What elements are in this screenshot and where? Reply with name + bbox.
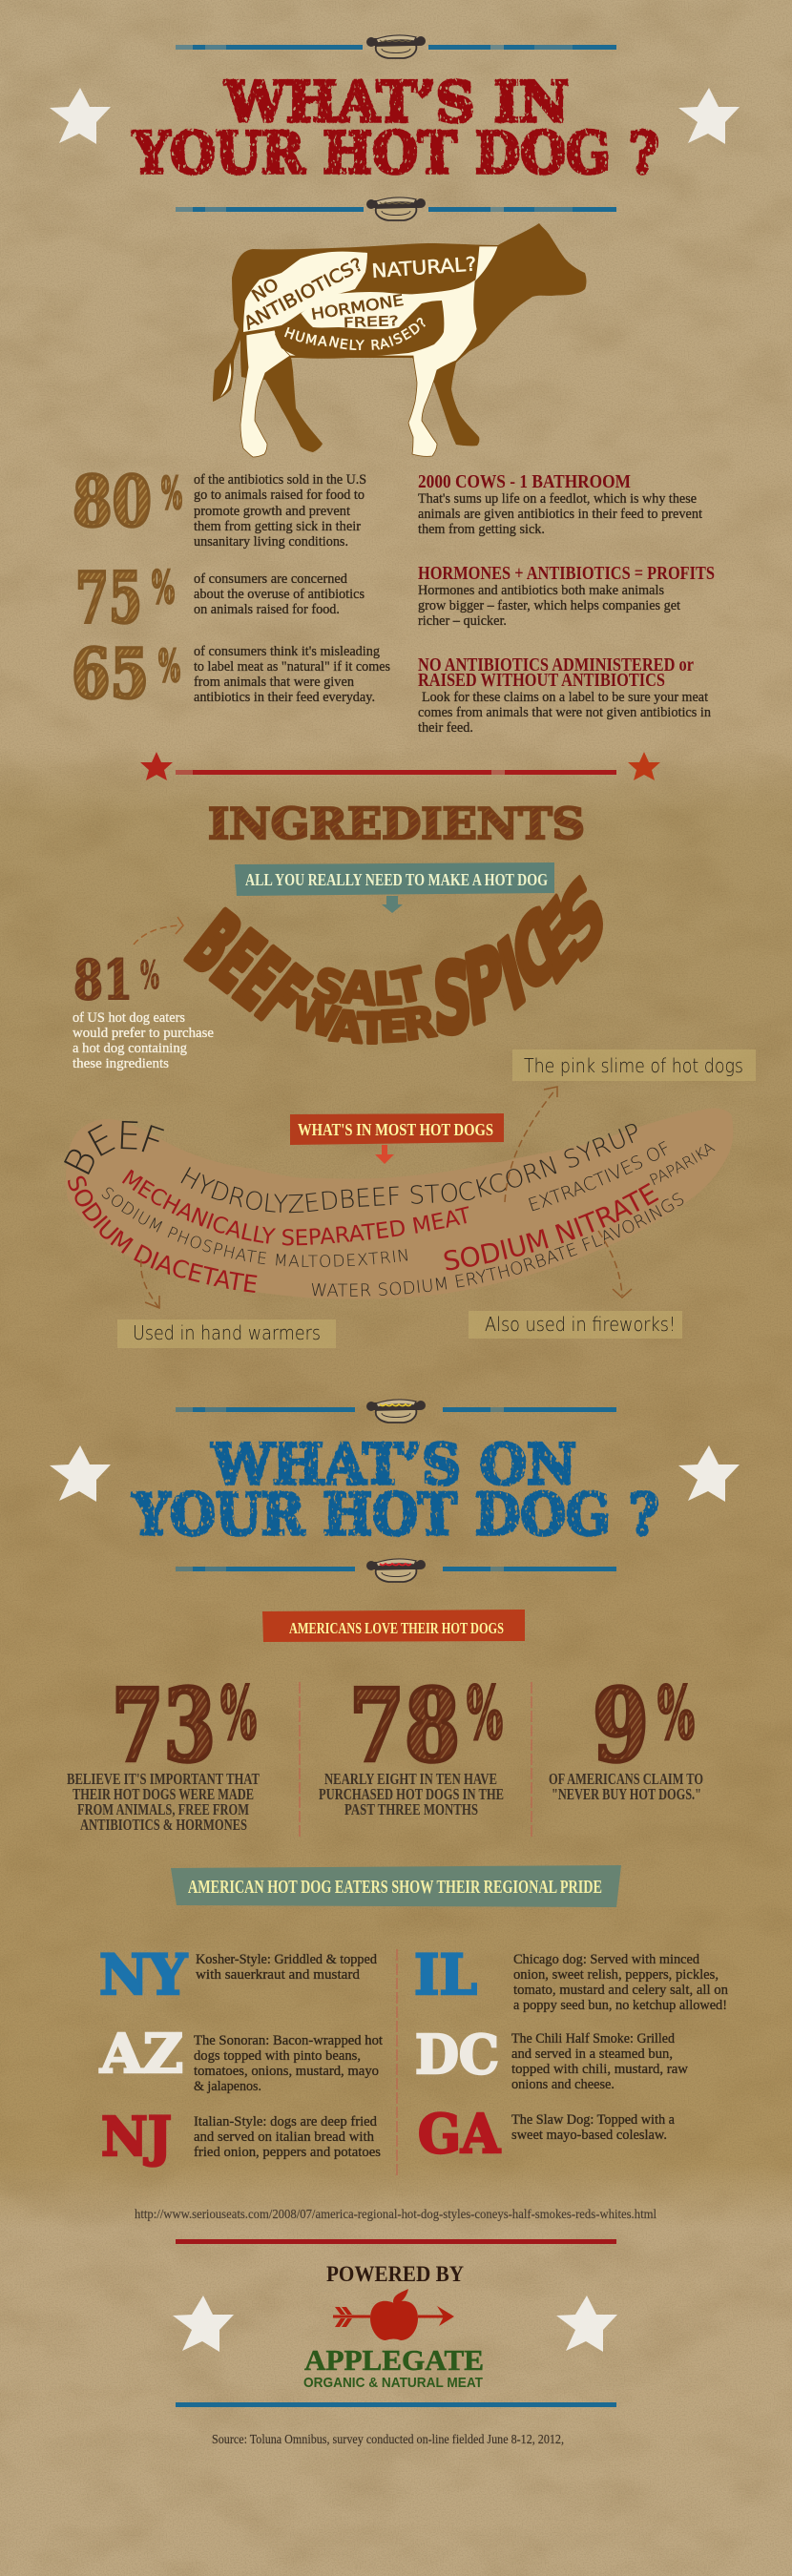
- region: IL: [414, 1942, 728, 2013]
- cow illustration: [213, 223, 586, 458]
- stat: 80 percent: %: [161, 467, 182, 519]
- stat: 81 percent: 81: [73, 948, 133, 1012]
- fact: hormones and antibiotics: richer – quicker.: [418, 613, 507, 629]
- stat: 78 percent: 78: [349, 1667, 460, 1784]
- stat: 9 percent: "NEVER BUY HOT DOGS.": [552, 1785, 701, 1803]
- bubble words: beef salt water spices: SPICES: [432, 855, 616, 1057]
- banner: what's in most hot dogs: WHAT'S IN MOST HOT DOGS: [298, 1120, 493, 1139]
- stat: 9 percent: OF AMERICANS CLAIM TO: [549, 1770, 703, 1788]
- ingredient: sodium nitrate: SODIUM NITRATE: [445, 1183, 658, 1271]
- fact: 2000 cows: [418, 471, 703, 537]
- fact: 2000 cows: them from getting sick.: [418, 522, 545, 537]
- region: DC: onions and cheese.: [511, 2077, 615, 2092]
- region: IL: IL: [414, 1942, 477, 2007]
- stat: 65 percent: of consumers think it's misleading: [194, 644, 380, 659]
- cow label: hormone free: [310, 291, 405, 331]
- region: AZ: AZ: [99, 2023, 183, 2086]
- dashed arrow to fireworks: [598, 1231, 632, 1298]
- dashed arrow to hand warmers: [141, 1259, 159, 1308]
- stat: 9 percent: 9: [593, 1667, 649, 1784]
- blue rule with ketchup hot dog: [176, 1559, 616, 1582]
- star left: [173, 2296, 234, 2352]
- cow label: natural: NATURAL?: [371, 252, 477, 282]
- title: what's in your hot dog: WHAT’S IN: [224, 70, 569, 135]
- callout: pink slime: The pink slime of hot dogs: [524, 1054, 743, 1077]
- title: what's on your hot dog: YOUR HOT DOG ?: [132, 1482, 659, 1548]
- region: NJ: and served on italian bread with: [194, 2129, 374, 2145]
- stat: 75 percent: 75: [75, 557, 142, 639]
- region: NJ: NJ: [101, 2106, 172, 2169]
- stat: 9 percent: %: [657, 1671, 695, 1755]
- top rule with hot dog icon: [176, 35, 616, 58]
- fact: hormones and antibiotics: grow bigger – faster, which helps companies get: [418, 598, 681, 613]
- stat: 80 percent: 80: [73, 461, 152, 543]
- region: NY: Kosher-Style: Griddled & topped: [196, 1952, 377, 1967]
- stat: 65 percent: %: [158, 640, 180, 692]
- stat: 73 percent: %: [220, 1671, 257, 1755]
- region: DC: The Chili Half Smoke: Grilled: [511, 2031, 675, 2046]
- stat: 73 percent: BELIEVE IT'S IMPORTANT THAT: [67, 1770, 260, 1788]
- banner: what's in most hot dogs: [290, 1113, 504, 1164]
- ingredient row: hydrolyzed beef stock, corn syrup: HYDROLYZEDBEEF STOCKCORN SYRUP: [181, 1124, 637, 1214]
- stat: 75 percent: about the overuse of antibiotics: [194, 587, 365, 602]
- stat: 65 percent: from animals that were given: [194, 675, 354, 690]
- region: GA: GA: [418, 2103, 501, 2166]
- stat: 9 percent: [549, 1667, 703, 1803]
- title: what's in your hot dog: YOUR HOT DOG ?: [132, 120, 659, 187]
- source url: http://www.seriouseats.com/2008/07/america-regional-hot-dog-styles-coneys-half-smokes-reds-whites.html: [135, 2208, 657, 2222]
- region: DC: DC: [415, 2024, 499, 2087]
- applegate logo: ORGANIC & NATURAL MEAT: [303, 2375, 483, 2391]
- blue rule with mustard hot dog: [176, 1400, 616, 1423]
- banner: regional pride: AMERICAN HOT DOG EATERS SHOW THEIR REGIONAL PRIDE: [188, 1877, 602, 1898]
- region: NJ: fried onion, peppers and potatoes: [194, 2145, 381, 2160]
- star left: [50, 1445, 111, 1502]
- region: NY: NY: [99, 1942, 188, 2007]
- stat: 81 percent: %: [140, 953, 159, 998]
- stat: 75 percent: of consumers are concerned: [194, 571, 347, 587]
- stat: 81 percent: of US hot dog eaters: [73, 1010, 185, 1026]
- fact: no antibiotics label: their feed.: [418, 720, 473, 736]
- region: GA: sweet mayo-based coleslaw.: [511, 2128, 667, 2143]
- region: IL: onion, sweet relish, peppers, pickles,: [513, 1967, 719, 1983]
- region: NY: [99, 1942, 377, 2007]
- stat: 81 percent: would prefer to purchase: [73, 1026, 214, 1041]
- icon: apple and arrow: [333, 2289, 454, 2340]
- region: AZ: tomatoes, onions, mustard, mayo: [194, 2064, 379, 2079]
- fact: no antibiotics label: comes from animals that were not given antibiotics in: [418, 705, 711, 720]
- fact: 2000 cows: That's sums up life on a feedlot, which is why these: [418, 491, 697, 507]
- stat: 75 percent: on animals raised for food.: [194, 602, 340, 617]
- banner: americans love their hot dogs: AMERICANS LOVE THEIR HOT DOGS: [289, 1619, 504, 1637]
- banner: regional pride: [171, 1865, 621, 1907]
- bubble words: beef salt water spices: WATER: [286, 988, 439, 1053]
- region: NJ: [101, 2106, 381, 2169]
- blue rule: [176, 2402, 616, 2407]
- stat: 73 percent: THEIR HOT DOGS WERE MADE: [73, 1785, 254, 1803]
- stat: 80 percent: them from getting sick in their: [194, 519, 361, 534]
- fact: hormones and antibiotics: HORMONES + ANTIBIOTICS = PROFITS: [418, 563, 715, 584]
- fact: no antibiotics label: Look for these claims on a label to be sure your meat: [422, 690, 709, 705]
- stat: 80 percent: promote growth and prevent: [194, 504, 351, 519]
- region: AZ: & jalapenos.: [194, 2079, 261, 2094]
- ingredient row: water, sodium erythorbate, flavorings: WATER SODIUM ERYTHORBATE FLAVORINGS: [311, 1193, 683, 1297]
- region: NJ: Italian-Style: dogs are deep fried: [194, 2114, 377, 2129]
- ingredient: beef: BEEF: [64, 1120, 164, 1175]
- applegate logo: APPLEGATE: [304, 2343, 484, 2377]
- region: AZ: The Sonoran: Bacon-wrapped hot: [194, 2033, 384, 2048]
- stat: 78 percent: NEARLY EIGHT IN TEN HAVE: [324, 1770, 497, 1788]
- title: what's in your hot dog: [132, 70, 659, 187]
- stat: 81 percent: these ingredients: [73, 1056, 169, 1071]
- applegate logo: [303, 2289, 484, 2391]
- ingredient: mechanically separated meat: MECHANICALLY SEPARATED MEAT: [122, 1170, 469, 1246]
- cow label: hormone free: FREE?: [344, 314, 399, 331]
- star right: [678, 1445, 740, 1502]
- title: what's on your hot dog: WHAT’S ON: [211, 1432, 576, 1497]
- stat: 80 percent: unsanitary living conditions.: [194, 534, 348, 550]
- bubble words: beef salt water spices: SALT: [306, 957, 429, 1016]
- region: DC: and served in a steamed bun,: [511, 2046, 673, 2062]
- stat: 80 percent: of the antibiotics sold in the U.S: [194, 472, 366, 488]
- source line: Source: Toluna Omnibus, survey conducted on-line fielded June 8-12, 2012,: [212, 2433, 564, 2447]
- cow label: hormone free: HORMONE: [310, 291, 405, 323]
- stat: 80 percent: go to animals raised for food to: [194, 488, 365, 503]
- star right: [678, 88, 740, 144]
- stat: 73 percent: ANTIBIOTICS & HORMONES: [80, 1816, 247, 1834]
- callout: hand warmers: Used in hand warmers: [133, 1321, 321, 1344]
- stat: 78 percent: %: [467, 1671, 503, 1755]
- region: IL: a poppy seed bun, no ketchup allowed!: [513, 1998, 727, 2013]
- stat: 81 percent: [73, 948, 214, 1071]
- cow label: humanely raised: HUMANELY RAISED?: [284, 318, 426, 350]
- ingredient: sodium phosphate maltodextrin: SODIUM PHOSPHATE MALTODEXTRIN: [101, 1187, 407, 1267]
- fact: no antibiotics label: NO ANTIBIOTICS ADMINISTERED or: [418, 654, 694, 675]
- fact: 2000 cows: 2000 COWS - 1 BATHROOM: [418, 471, 631, 492]
- stat: 78 percent: PAST THREE MONTHS: [344, 1800, 478, 1818]
- title: what's on your hot dog: [132, 1432, 659, 1548]
- fact: no antibiotics label: RAISED WITHOUT ANTIBIOTICS: [418, 670, 665, 691]
- region: IL: tomato, mustard and celery salt, all on: [513, 1983, 728, 1998]
- dashed arrow to pink slime: [505, 1087, 557, 1202]
- stat: 81 percent: a hot dog containing: [73, 1041, 187, 1056]
- bubble words: beef salt water spices: [171, 855, 616, 1057]
- cow label: no antibiotics: ANTIBIOTICS?: [240, 254, 366, 334]
- fact: no antibiotics label: [418, 654, 711, 736]
- region: AZ: dogs topped with pinto beans,: [194, 2048, 361, 2064]
- ingredient: sodium diacetate: SODIUM DIACETATE: [68, 1175, 258, 1293]
- stat: 65 percent: to label meat as "natural" if it comes: [194, 659, 390, 675]
- red rule: [176, 2239, 616, 2244]
- region: GA: [418, 2103, 675, 2166]
- fact: hormones and antibiotics: [418, 563, 715, 629]
- fact: hormones and antibiotics: Hormones and antibiotics both make animals: [418, 583, 664, 598]
- ingredient: paparika: PAPARIKA: [649, 1143, 716, 1185]
- stat: 75 percent: [75, 557, 365, 639]
- stat: 65 percent: antibiotics in their feed everyday.: [194, 690, 375, 705]
- region: GA: The Slaw Dog: Topped with a: [511, 2112, 675, 2128]
- powered by: POWERED BY: [326, 2262, 464, 2286]
- region: AZ: [99, 2023, 384, 2094]
- banner: americans love their hot dogs: [262, 1610, 525, 1642]
- red rule with stars: [140, 752, 660, 780]
- sausage ingredient list: [64, 1109, 733, 1299]
- stat: 80 percent: [73, 461, 366, 550]
- region: DC: [415, 2024, 688, 2092]
- cow label: no antibiotics: NO: [248, 275, 282, 306]
- star right: [556, 2296, 617, 2352]
- ingredient: extractives of: EXTRACTIVES OF: [529, 1141, 667, 1212]
- stat: 75 percent: %: [152, 562, 175, 614]
- region: DC: topped with chili, mustard, raw: [511, 2062, 688, 2077]
- stat: 78 percent: [319, 1667, 504, 1818]
- arrow to 81 percent ingredients: [134, 917, 183, 945]
- banner: all you really need: [235, 862, 554, 913]
- stat: 73 percent: [67, 1667, 260, 1834]
- region: IL: Chicago dog: Served with minced: [513, 1952, 699, 1967]
- banner: all you really need: ALL YOU REALLY NEED TO MAKE A HOT DOG: [245, 870, 548, 889]
- callout: fireworks: Also used in fireworks!: [485, 1313, 676, 1336]
- fact: 2000 cows: animals are given antibiotics in their feed to prevent: [418, 507, 703, 522]
- second rule with hot dog icon: [176, 197, 616, 220]
- stat: 65 percent: [72, 634, 390, 714]
- stat: 73 percent: FROM ANIMALS, FREE FROM: [77, 1800, 249, 1818]
- callout: pink slime: [512, 1049, 756, 1081]
- bubble words: beef salt water spices: BEEF: [171, 895, 323, 1045]
- stat: 73 percent: 73: [112, 1667, 216, 1784]
- region: NY: with sauerkraut and mustard: [196, 1967, 360, 1983]
- stat: 78 percent: PURCHASED HOT DOGS IN THE: [319, 1785, 504, 1803]
- stat: 65 percent: 65: [72, 634, 149, 714]
- star left: [50, 88, 111, 144]
- heading: ingredients: INGREDIENTS: [208, 799, 585, 849]
